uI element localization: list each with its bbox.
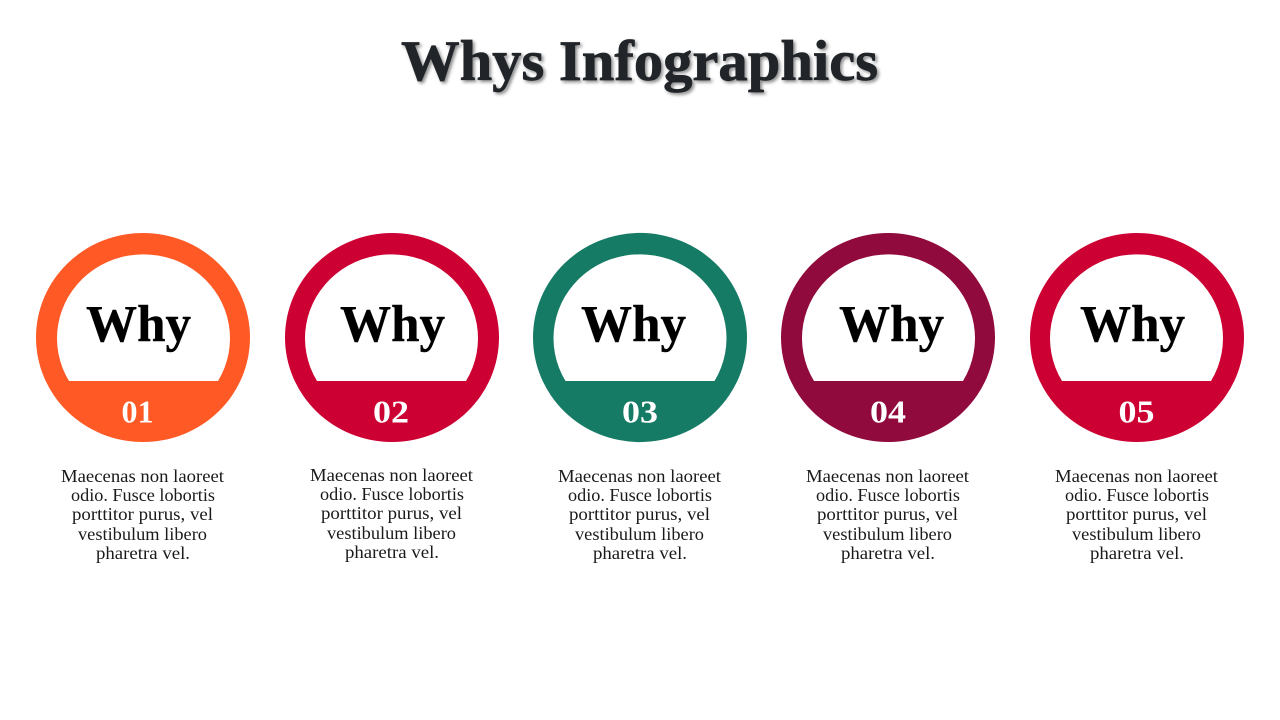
- ring badge 02: [285, 233, 499, 442]
- ring badge 03: [533, 233, 747, 442]
- panel: why 04: [781, 233, 995, 563]
- description 02: Maecenas non laoreet: [310, 465, 473, 485]
- description 03: [558, 466, 721, 563]
- description 01: Maecenas non laoreet: [61, 466, 224, 486]
- description 03: odio. Fusce lobortis: [568, 485, 712, 505]
- number 04: 04: [870, 394, 906, 430]
- description 02: porttitor purus, vel: [321, 503, 462, 523]
- panel: why 01: [36, 233, 250, 563]
- description 01: odio. Fusce lobortis: [71, 485, 215, 505]
- description 03: Maecenas non laoreet: [558, 466, 721, 486]
- description 05: odio. Fusce lobortis: [1065, 485, 1209, 505]
- description 03: pharetra vel.: [593, 543, 687, 563]
- title: Whys Infographics: [401, 30, 878, 93]
- description 04: Maecenas non laoreet: [806, 466, 969, 486]
- description 05: vestibulum libero: [1072, 524, 1201, 544]
- number 02: 02: [373, 394, 409, 430]
- description 04: porttitor purus, vel: [817, 504, 958, 524]
- label: why: Why: [1080, 296, 1185, 353]
- label: why: Why: [86, 296, 191, 353]
- description 02: vestibulum libero: [327, 523, 456, 543]
- description 02: odio. Fusce lobortis: [320, 484, 464, 504]
- ring badge 04: [781, 233, 995, 442]
- description 02: pharetra vel.: [345, 542, 439, 562]
- description 04: vestibulum libero: [823, 524, 952, 544]
- panel: why 05: [1030, 233, 1244, 563]
- description 01: porttitor purus, vel: [72, 504, 213, 524]
- description 05: porttitor purus, vel: [1066, 504, 1207, 524]
- description 03: porttitor purus, vel: [569, 504, 710, 524]
- label: why: Why: [581, 296, 686, 353]
- description 03: vestibulum libero: [575, 524, 704, 544]
- panel: why 02: [285, 233, 499, 562]
- description 04: [806, 466, 969, 563]
- description 04: odio. Fusce lobortis: [816, 485, 960, 505]
- number 03: 03: [622, 394, 658, 430]
- number 01: 01: [122, 394, 154, 430]
- label: why: Why: [340, 296, 445, 353]
- ring badge 05: [1030, 233, 1244, 442]
- description 05: Maecenas non laoreet: [1055, 466, 1218, 486]
- description 01: vestibulum libero: [78, 524, 207, 544]
- label: why: Why: [839, 296, 944, 353]
- description 01: [61, 466, 224, 563]
- description 05: pharetra vel.: [1090, 543, 1184, 563]
- description 04: pharetra vel.: [841, 543, 935, 563]
- description 02: [310, 465, 473, 562]
- description 01: pharetra vel.: [96, 543, 190, 563]
- ring badge 01: [36, 233, 250, 442]
- panel: why 03: [533, 233, 747, 563]
- number 05: 05: [1118, 394, 1154, 430]
- description 05: [1055, 466, 1218, 563]
